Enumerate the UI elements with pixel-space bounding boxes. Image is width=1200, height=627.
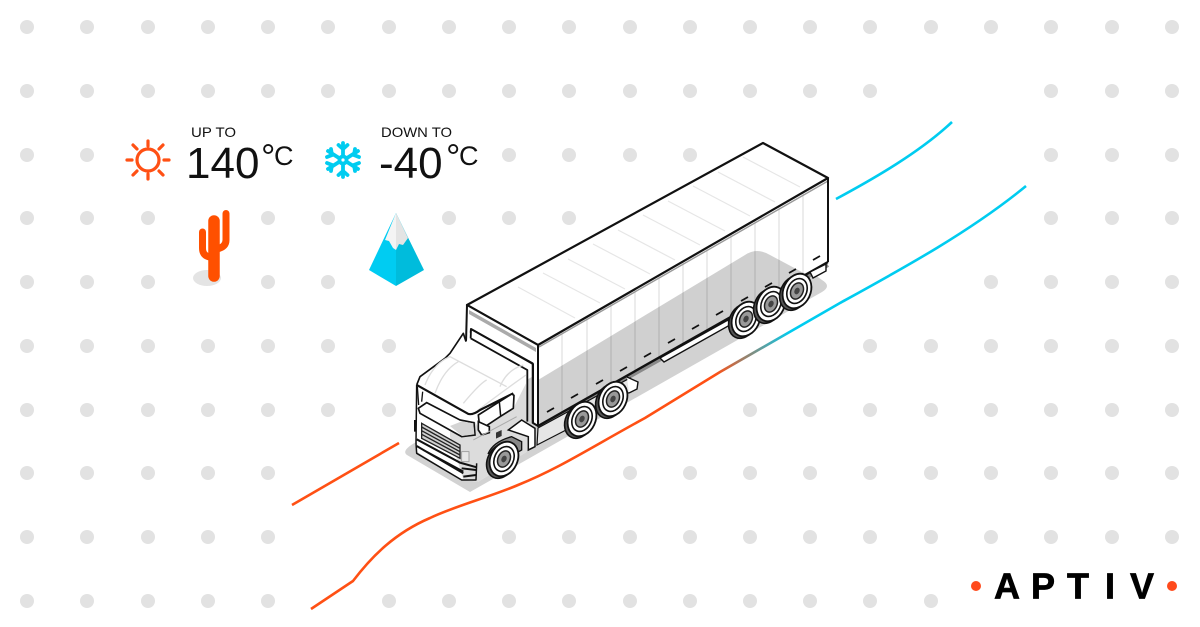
temperature panel: cold: [327, 124, 478, 286]
icon: sun: [127, 141, 169, 179]
cab roof outline: [417, 333, 466, 385]
left mirror: [412, 420, 418, 432]
value: 140: 140: [186, 139, 259, 188]
value: -40: -40: [379, 139, 443, 188]
side window: [478, 394, 514, 430]
ground shadow: [405, 250, 827, 492]
cab roof details: [425, 357, 526, 415]
bumper: [417, 439, 477, 477]
front top edge: [417, 385, 513, 414]
truck illustration: [405, 143, 828, 492]
A pillar: [417, 387, 423, 405]
trailer side panel seams: [562, 192, 803, 412]
visor shadow: [450, 421, 474, 436]
label: down to: DOWN TO: [381, 124, 452, 140]
road line: upper edge blue: [836, 122, 952, 199]
sun visor: [418, 403, 475, 437]
label: up to: UP TO: [191, 124, 236, 140]
trailer front face: [466, 305, 538, 426]
step: [508, 420, 535, 450]
trailer bottom rail shade: [538, 265, 828, 428]
right mirror: [478, 422, 489, 435]
trailer front shadow: [469, 310, 536, 352]
grille: [422, 423, 460, 458]
trailer side wall: [538, 178, 828, 426]
road line: lower edge orange to blue: [311, 186, 1026, 609]
icon: snowflake: [327, 143, 359, 177]
wheel arch: [488, 437, 522, 457]
chassis: [537, 378, 630, 445]
logo: Aptiv: APTIV: [994, 566, 1154, 606]
side window divider: [499, 402, 501, 416]
cab shadow: [450, 383, 535, 482]
front wheel: [481, 437, 524, 483]
unit: degree sign: °: [261, 136, 275, 177]
trailer top edge shade: [539, 181, 828, 347]
unit: degree sign: °: [446, 136, 460, 177]
trailer bottom rail: [538, 262, 828, 426]
icon: cactus: [193, 214, 226, 286]
trailer roof seams: [518, 157, 800, 318]
trailer side skirt: [660, 320, 730, 362]
unit: C: C: [459, 141, 478, 171]
middle wheels: [559, 377, 633, 443]
temperature panel: heat: [127, 124, 294, 286]
road line: upper edge orange: [292, 443, 399, 505]
rear wheels: [723, 269, 817, 343]
trailer side shadow: [538, 251, 828, 426]
cab body: [417, 330, 535, 482]
headlight: [462, 452, 469, 462]
cab: [415, 329, 535, 482]
door details: [473, 417, 517, 440]
air deflector lines: [471, 329, 533, 423]
trailer roof: [467, 143, 828, 345]
unit: C: C: [274, 141, 294, 171]
icon: snowy mountain: [369, 213, 424, 286]
cab front outline: [416, 385, 477, 480]
rear bumper: [810, 264, 826, 278]
trailer bottom rail markers: [547, 256, 820, 412]
door vent: [496, 430, 502, 439]
trailer edges: [538, 178, 828, 426]
mudguard behind middle wheels: [627, 377, 638, 393]
